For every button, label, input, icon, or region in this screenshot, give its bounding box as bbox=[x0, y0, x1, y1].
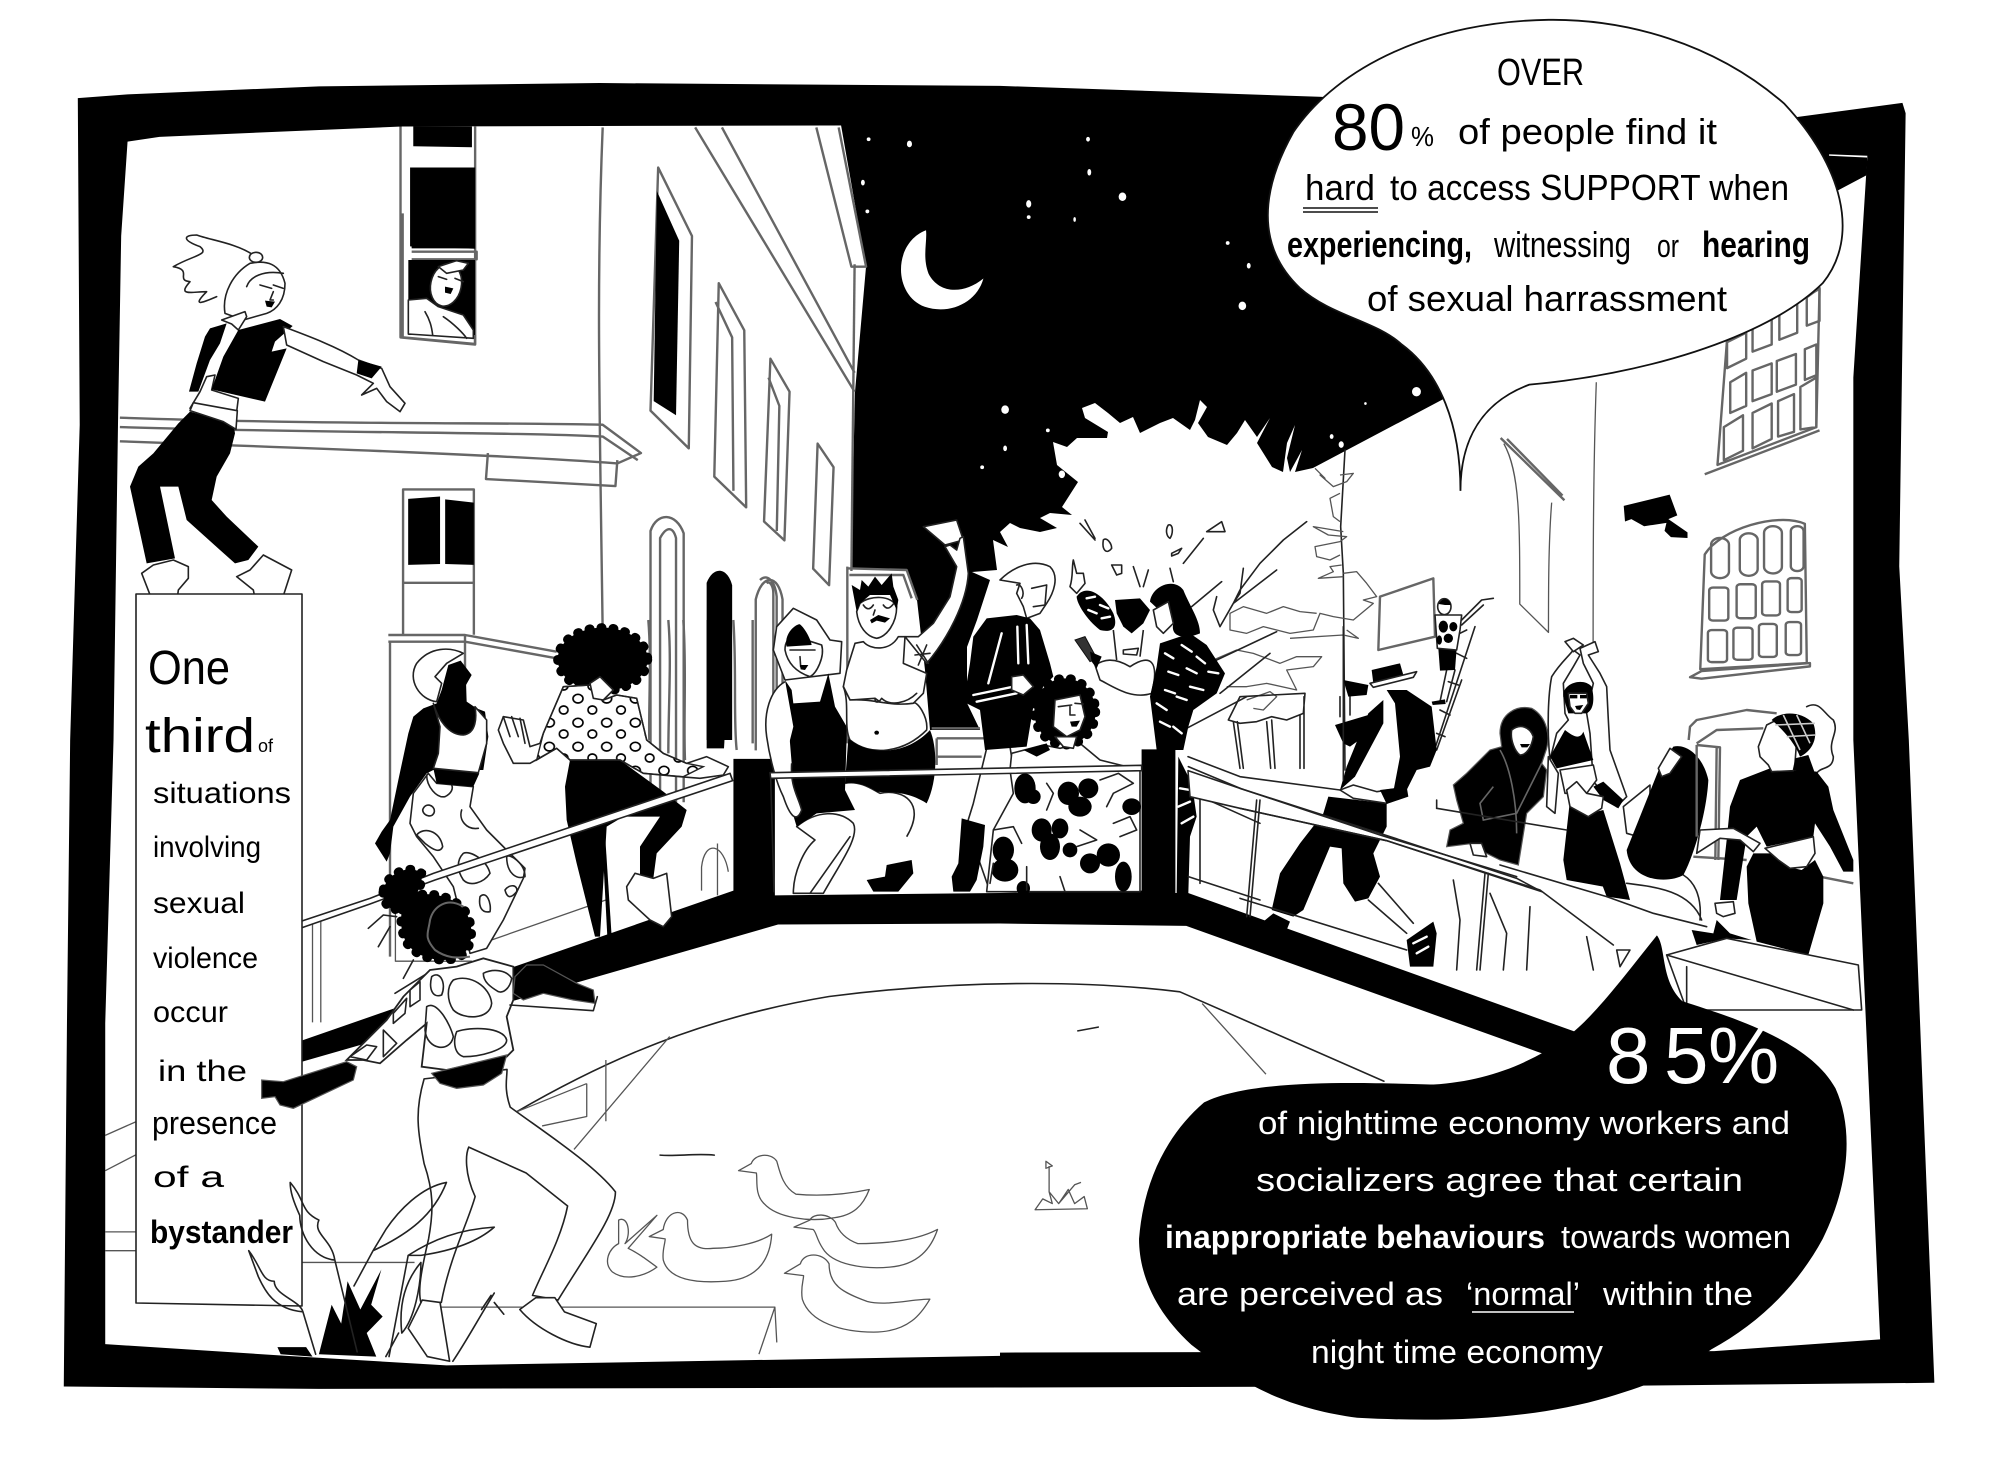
bubble text: socializers agree that certain bbox=[1256, 1162, 1743, 1198]
awning bbox=[1228, 693, 1305, 768]
top window panes bbox=[410, 126, 475, 249]
bubble text: of sexual harrassment bbox=[1367, 278, 1727, 319]
foreground plants bbox=[249, 1182, 504, 1361]
bubble text bbox=[1165, 1011, 1791, 1370]
figure: woman with raised arms bbox=[1547, 638, 1630, 900]
banner text: One bbox=[148, 642, 230, 695]
bubble text: towards women bbox=[1561, 1219, 1791, 1255]
figure: foreground dancer upper body bbox=[262, 869, 597, 1108]
left ramp posts bbox=[313, 844, 728, 1022]
low wall in front bbox=[1667, 938, 1862, 1010]
lower window bbox=[403, 489, 474, 635]
tree outline, billboard and awning bbox=[1080, 450, 1493, 770]
bubble text: 80 bbox=[1332, 90, 1405, 164]
figure: foreground dancer legs and shoes bbox=[408, 1069, 615, 1361]
billboard bbox=[1378, 578, 1435, 650]
duck one bbox=[739, 1155, 869, 1219]
banner text: occur bbox=[153, 996, 228, 1029]
banner text: of a bbox=[153, 1161, 224, 1194]
bubble text: to access SUPPORT when bbox=[1390, 167, 1789, 208]
bubble text: night time economy bbox=[1311, 1334, 1603, 1370]
duck four bbox=[649, 1213, 772, 1282]
banner text: sexual bbox=[153, 887, 245, 920]
bubble text: ‘normal’ bbox=[1466, 1276, 1580, 1312]
white frame corner line bbox=[1829, 155, 1869, 176]
bubble text: 85% bbox=[1606, 1011, 1779, 1100]
figure: person in black hoodie bbox=[1447, 708, 1548, 865]
right ramp rails bbox=[1188, 627, 1707, 970]
bridge arch line bbox=[517, 983, 1384, 1112]
figure: person in black jacket bbox=[952, 563, 1055, 892]
upper window with onlooker bbox=[403, 213, 477, 344]
banner text: involving bbox=[153, 831, 261, 864]
bubble text: % bbox=[1411, 121, 1434, 152]
figure: woman with long hair and tiger-striped coat bbox=[1150, 584, 1225, 893]
bubble text: within the bbox=[1602, 1276, 1753, 1312]
bubble text: are perceived as bbox=[1177, 1276, 1443, 1312]
figure: person with bob and black top bbox=[766, 608, 855, 893]
bubble text: OVER bbox=[1497, 52, 1584, 94]
duck five bbox=[608, 1215, 657, 1277]
duck two bbox=[794, 1215, 938, 1268]
moon bbox=[901, 230, 983, 309]
figure: woman with bum bag bbox=[1667, 705, 1862, 1010]
water marks bbox=[660, 1027, 1098, 1155]
figure: person with patterned mask bbox=[1070, 560, 1155, 695]
speech bubble: 80 percent statistic bbox=[1268, 20, 1843, 491]
bubble text: of nighttime economy workers and bbox=[1258, 1105, 1790, 1141]
figure: dancer on the window ledge bbox=[130, 235, 405, 627]
figure: woman with spotted skirt bbox=[375, 649, 525, 953]
night sky bbox=[841, 125, 1867, 730]
bubble text: experiencing, bbox=[1287, 224, 1472, 265]
figure: man with spiky hair taking a selfie bbox=[843, 520, 968, 892]
small building behind crowd bbox=[388, 620, 753, 958]
bubble text: witnessing bbox=[1493, 224, 1631, 265]
banner text: in the bbox=[158, 1055, 247, 1088]
figure: woman with afro and polka-dot blouse bbox=[300, 628, 733, 937]
figure: painter on ladder bbox=[1432, 598, 1493, 753]
icon: small flower tuft bbox=[1035, 1161, 1087, 1210]
panel: left statistic banner bbox=[136, 594, 302, 1306]
duck three bbox=[784, 1255, 930, 1332]
small building at crowd centre bbox=[760, 567, 987, 765]
lower right window bbox=[1690, 520, 1810, 679]
speech bubble: 85 percent statistic bbox=[1139, 935, 1847, 1420]
left building bbox=[120, 126, 866, 802]
banner text: presence bbox=[152, 1105, 277, 1141]
bubble text: inappropriate behaviours bbox=[1165, 1219, 1545, 1255]
arched ground floor doors bbox=[651, 517, 783, 802]
bubble text: or bbox=[1657, 228, 1679, 264]
figure: curly-haired woman in floral dress bbox=[987, 678, 1141, 896]
bridge centre handrail bbox=[770, 765, 1260, 900]
figure: woman in hijab bbox=[1567, 746, 1708, 920]
banner text: bystander bbox=[150, 1214, 293, 1250]
figure: runner in hat bbox=[1263, 663, 1437, 967]
right building bbox=[1501, 155, 1869, 679]
arched upper windows bbox=[651, 168, 834, 585]
bridge black wall and posts bbox=[105, 749, 1575, 1354]
canal under-arch lines bbox=[517, 1004, 1266, 1149]
left building base and ledge bbox=[105, 1121, 777, 1354]
left handrail bbox=[300, 773, 733, 928]
bubble text: hearing bbox=[1702, 224, 1810, 265]
bubble text bbox=[1287, 52, 1810, 319]
ducks bbox=[608, 1155, 938, 1332]
banner text: situations bbox=[153, 777, 291, 810]
banner text: violence bbox=[153, 942, 258, 975]
banner text: of bbox=[258, 736, 274, 756]
banner text: third bbox=[145, 710, 255, 763]
upper right window bbox=[1705, 288, 1820, 474]
bubble text: of people find it bbox=[1458, 111, 1717, 152]
banner text bbox=[145, 642, 293, 1250]
hanging banner bbox=[1501, 438, 1564, 632]
stars bbox=[861, 137, 1421, 478]
bubble text: hard bbox=[1305, 167, 1375, 208]
icon: CCTV camera bbox=[1624, 495, 1688, 538]
